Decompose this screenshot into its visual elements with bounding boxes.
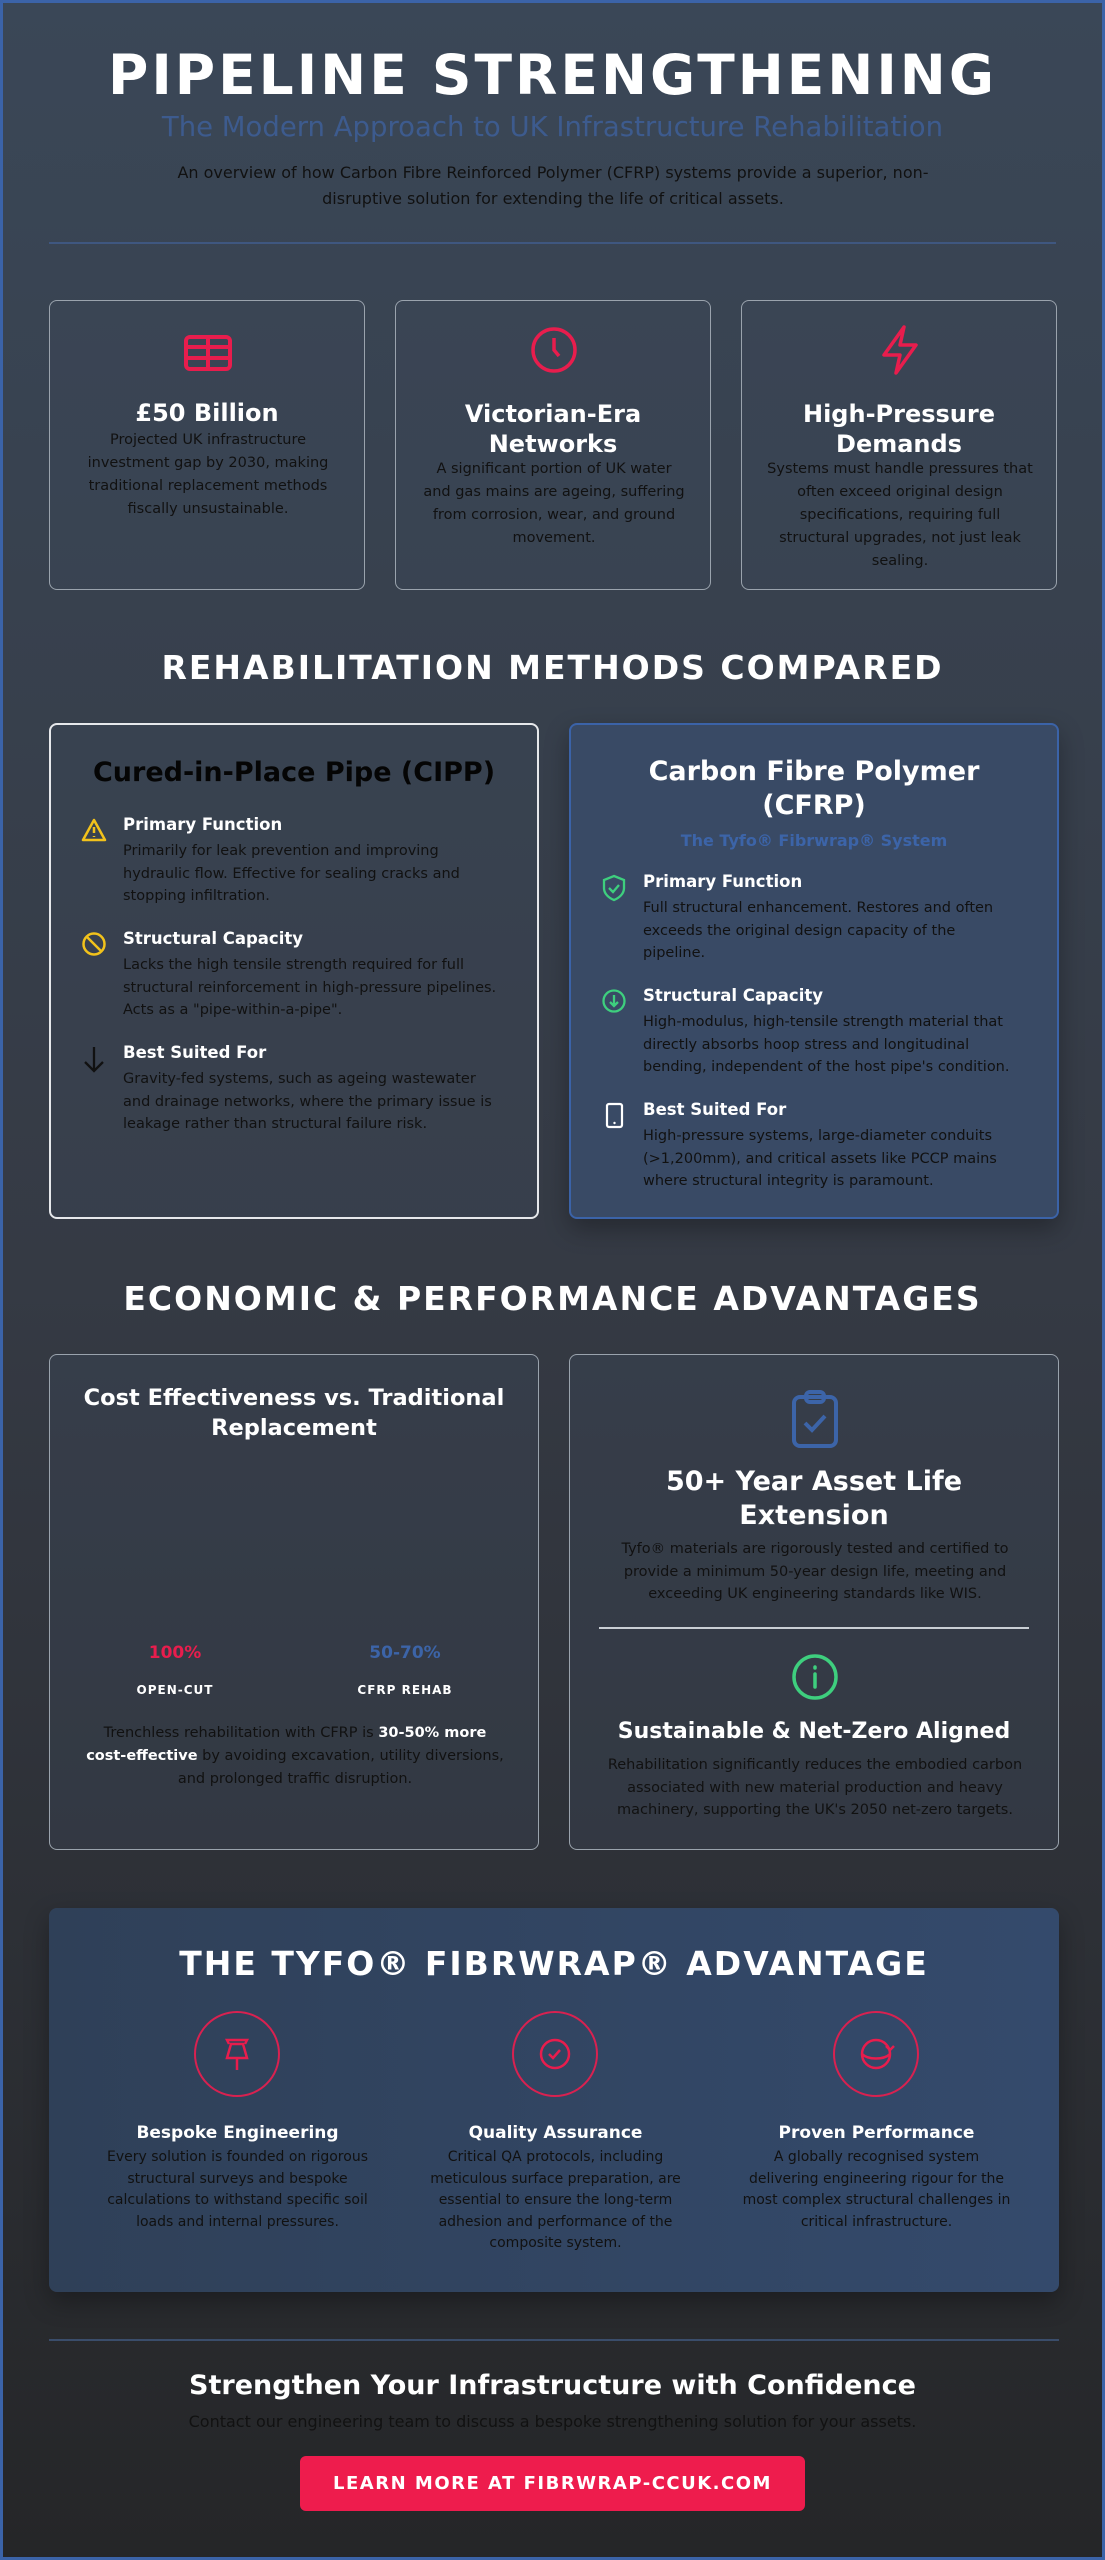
CTA heading: Strengthen Your Infrastructure with Confidence — [189, 2370, 916, 2401]
heading: asset life: 50+ Year Asset Life — [666, 1466, 962, 1497]
chart heading: Cost Effectiveness vs. Traditional — [84, 1385, 504, 1411]
feature: proven performance: A globally recognised system delivering engineering rigour for the most complex structural challenges in critical infrastructure. — [743, 2149, 1010, 2230]
chart caption: Trenchless rehabilitation with CFRP is 30-50% more — [104, 1725, 486, 1741]
item: structural capacity: Structural Capacity — [123, 929, 303, 948]
CTA text: Contact our engineering team to discuss a bespoke strengthening solution for your assets. — [189, 2412, 916, 2431]
chart heading — [84, 1385, 504, 1441]
item: best suited — [606, 1100, 997, 1189]
panel: CIPP — [49, 723, 539, 1219]
advantage heading: THE TYFO® FIBRWRAP® ADVANTAGE — [179, 1944, 929, 1983]
item: primary function: Primarily for leak prevention and improving hydraulic flow. Effective for sealing cracks and stopping infiltration. — [123, 843, 460, 904]
feature: bespoke engineering — [107, 2011, 368, 2230]
feature: proven performance — [743, 2011, 1010, 2230]
feature: quality assurance: Critical QA protocols, including meticulous surface preparation, are essential to ensure the long-term adhesion and performance of the composite system. — [430, 2149, 681, 2251]
label open-cut: OPEN-CUT — [137, 1683, 213, 1697]
bar chart labels — [137, 1643, 453, 1697]
panel: stat £50 Billion — [49, 300, 365, 590]
heading: asset life: Extension — [739, 1500, 889, 1531]
panel: cost effectiveness — [49, 1354, 539, 1850]
icon: money — [184, 335, 232, 371]
CFRP heading: Carbon Fibre Polymer — [649, 756, 979, 787]
CTA button — [300, 2456, 805, 2511]
chart heading: Replacement — [211, 1415, 377, 1441]
stat text: Systems must handle pressures that often exceed original design specifications, requiring full structural upgrades, not just leak sealing. — [767, 461, 1033, 569]
stat text — [423, 461, 685, 546]
panel: stat Victorian — [395, 300, 711, 590]
feature: quality assurance — [430, 2011, 681, 2251]
heading: methods compared: REHABILITATION METHODS COMPARED — [161, 648, 944, 687]
stat heading: High-Pressure — [803, 400, 995, 428]
stat heading: Victorian-Era — [465, 400, 641, 428]
CIPP heading: Cured-in-Place Pipe (CIPP) — [93, 757, 495, 788]
feature: bespoke engineering: Bespoke Engineering — [136, 2123, 339, 2143]
icon: globe — [833, 2011, 919, 2097]
stat text: and gas mains are ageing, suffering — [423, 484, 685, 500]
heading: asset life — [666, 1466, 962, 1531]
stat text: Projected UK infrastructure investment gap by 2030, making traditional replacement methods fiscally unsustainable. — [88, 432, 328, 517]
text: asset life: Tyfo® materials are rigorously tested and certified to provide a minimum 50-year design life, meeting and exceeding UK engineering standards like WIS. — [621, 1541, 1008, 1602]
item: primary function: Primary Function — [123, 815, 282, 834]
value cfrp: 50-70% — [369, 1643, 441, 1663]
stat heading — [803, 400, 995, 458]
feature: quality assurance: Quality Assurance — [469, 2123, 642, 2143]
icon: check circle — [512, 2011, 598, 2097]
item: primary function: Full structural enhancement. Restores and often exceeds the original design capacity of the pipeline. — [643, 900, 993, 961]
item: structural capacity — [82, 929, 496, 1018]
panel: asset life & sustainability — [569, 1354, 1059, 1850]
item: structural capacity: Structural Capacity — [643, 986, 823, 1005]
item: best suited: High-pressure systems, large-diameter conduits (>1,200mm), and critical assets like PCCP mains where structural integrity is paramount. — [643, 1128, 997, 1189]
chart caption — [86, 1725, 504, 1787]
item: primary function — [602, 872, 993, 961]
stat heading — [465, 400, 641, 458]
chart caption: cost-effective by avoiding excavation, utility diversions, and prolonged traffic disruption. — [86, 1748, 504, 1787]
title: PIPELINE STRENGTHENING — [108, 43, 997, 107]
stat text: movement. — [512, 530, 596, 546]
feature: bespoke engineering: Every solution is founded on rigorous structural surveys and bespoke calculations to withstand specific soil loads and internal pressures. — [107, 2149, 368, 2230]
stat text: A significant portion of UK water — [436, 461, 672, 477]
item: best suited: Gravity-fed systems, such as ageing wastewater and drainage networks, where the primary issue is leakage rather than structural failure risk. — [123, 1071, 492, 1132]
item: structural capacity: Lacks the high tensile strength required for full structural reinforcement in high-pressure pipelines. Acts as a "pipe-within-a-pipe". — [123, 957, 496, 1018]
item: best suited: Best Suited For — [643, 1100, 786, 1119]
item: best suited — [84, 1043, 492, 1132]
label cfrp: CFRP REHAB — [357, 1683, 453, 1697]
panel: CFRP — [569, 723, 1059, 1219]
stat heading: Networks — [489, 430, 617, 458]
stat heading: Demands — [836, 430, 962, 458]
value open-cut: 100% — [149, 1643, 201, 1663]
icon: clipboard — [792, 1390, 838, 1448]
CTA button: LEARN MORE AT FIBRWRAP-CCUK.COM — [333, 2473, 772, 2494]
text: sustainable: Rehabilitation significantly reduces the embodied carbon associated with new material production and heavy machinery, supporting the UK's 2050 net-zero targets. — [608, 1757, 1022, 1818]
item: best suited: Best Suited For — [123, 1043, 266, 1062]
item: primary function — [82, 815, 460, 904]
icon: lightning — [882, 325, 918, 375]
heading: sustainable: Sustainable & Net-Zero Aligned — [618, 1719, 1010, 1744]
icon: clock — [531, 327, 577, 373]
intro text: An overview of how Carbon Fibre Reinforced Polymer (CFRP) systems provide a superior, non-disruptive solution for extending the life of critical assets. — [177, 163, 929, 208]
heading: economic: ECONOMIC & PERFORMANCE ADVANTAGES — [123, 1279, 982, 1318]
item: structural capacity: High-modulus, high-tensile strength material that directly absorbs hoop stress and longitudinal bending, independent of the host pipe's condition. — [643, 1014, 1010, 1075]
subtitle: The Modern Approach to UK Infrastructure Rehabilitation — [162, 111, 943, 143]
CFRP heading: (CFRP) — [762, 790, 866, 821]
item: primary function: Primary Function — [643, 872, 802, 891]
icon: pin — [194, 2011, 280, 2097]
icon: info — [792, 1654, 838, 1700]
stat text: from corrosion, wear, and ground — [433, 507, 675, 523]
CFRP subheading: The Tyfo® Fibrwrap® System — [681, 831, 947, 850]
panel: Tyfo advantage — [49, 1908, 1059, 2292]
feature: proven performance: Proven Performance — [779, 2123, 974, 2143]
panel: stat High-Pressure — [741, 300, 1057, 590]
CFRP heading — [649, 756, 980, 821]
stat heading: £50 Billion — [135, 399, 279, 427]
item: structural capacity — [602, 986, 1010, 1075]
